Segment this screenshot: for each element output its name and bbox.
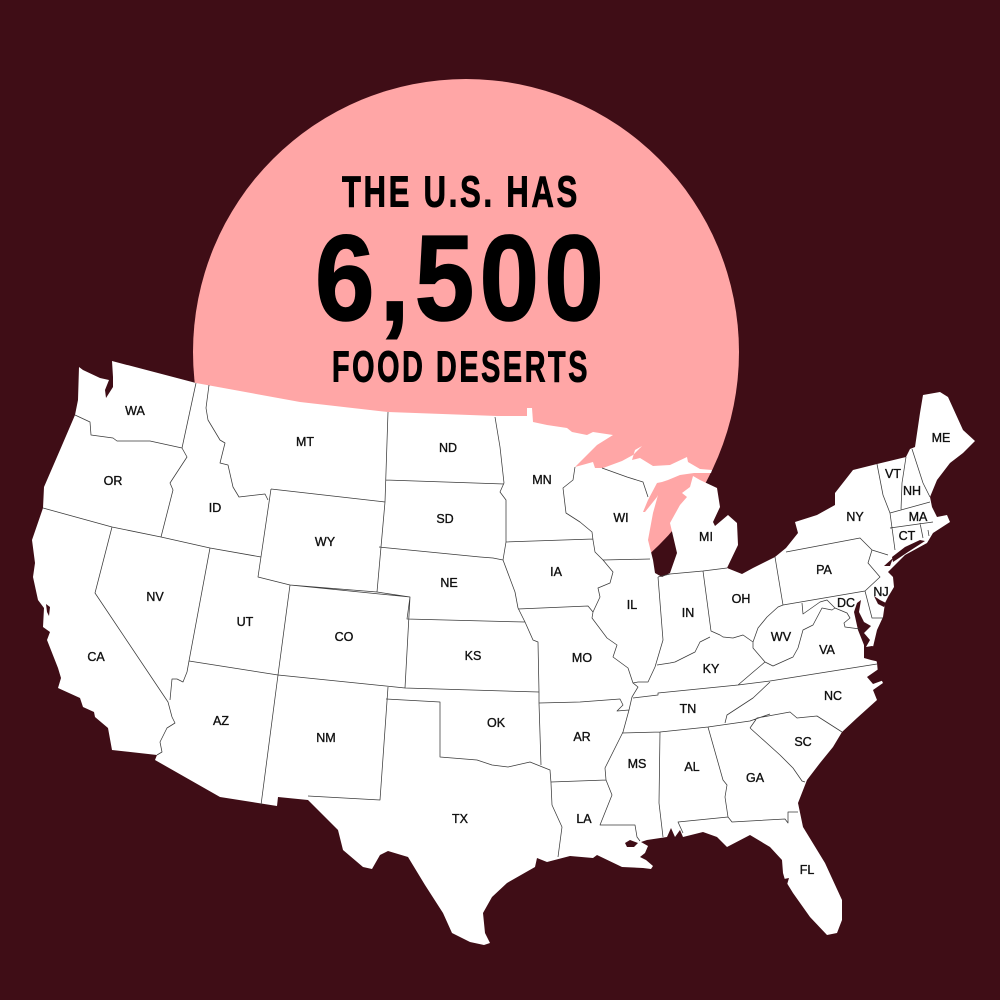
state abbreviations: WV <box>771 630 792 644</box>
state abbreviations: MO <box>572 651 592 665</box>
state abbreviations: CO <box>335 630 354 644</box>
state abbreviations <box>87 404 950 877</box>
state abbreviations: PA <box>816 563 833 577</box>
state abbreviations: NH <box>903 484 921 498</box>
state abbreviations: NE <box>440 576 458 590</box>
state abbreviations: GA <box>746 771 765 785</box>
state abbreviations: ND <box>439 441 457 455</box>
state abbreviations: IL <box>627 598 637 612</box>
state abbreviations: LA <box>576 812 592 826</box>
state abbreviations: SD <box>436 512 454 526</box>
state abbreviations: WA <box>125 404 145 418</box>
state abbreviations: MN <box>532 473 552 487</box>
state abbreviations: IN <box>682 606 694 620</box>
state abbreviations: VT <box>885 467 901 481</box>
state abbreviations: NV <box>146 590 164 604</box>
land outline <box>32 361 975 945</box>
state abbreviations: MA <box>909 510 928 524</box>
state abbreviations: OH <box>732 592 750 606</box>
state abbreviations: TN <box>680 702 696 716</box>
state abbreviations: ME <box>932 431 950 445</box>
state abbreviations: CA <box>87 650 105 664</box>
headline <box>315 168 609 392</box>
state abbreviations: MS <box>628 757 646 771</box>
state borders <box>43 383 933 857</box>
state abbreviations: WI <box>613 511 629 525</box>
state abbreviations: NM <box>316 731 336 745</box>
state abbreviations: DC <box>837 596 855 610</box>
state abbreviations: UT <box>237 615 254 629</box>
state abbreviations: WY <box>315 535 336 549</box>
state abbreviations: KS <box>465 649 481 663</box>
state abbreviations: AZ <box>213 714 229 728</box>
state abbreviations: VA <box>819 643 836 657</box>
state abbreviations: TX <box>452 812 469 826</box>
state abbreviations: ID <box>209 501 221 515</box>
US map <box>32 361 975 945</box>
big number: 6,500 <box>315 210 609 346</box>
state abbreviations: MI <box>699 530 713 544</box>
state abbreviations: AR <box>573 730 591 744</box>
state abbreviations: IA <box>550 565 563 579</box>
state abbreviations: NJ <box>873 585 889 599</box>
dark bays and sounds <box>46 540 925 888</box>
state abbreviations: KY <box>703 662 720 676</box>
headline line 1: THE U.S. HAS <box>342 168 580 216</box>
state abbreviations: OR <box>104 474 122 488</box>
state abbreviations: AL <box>684 760 700 774</box>
state abbreviations: CT <box>899 529 916 543</box>
state abbreviations: FL <box>800 863 814 877</box>
state abbreviations: OK <box>487 716 506 730</box>
headline line 3: FOOD DESERTS <box>332 342 590 392</box>
state abbreviations: NY <box>846 510 864 524</box>
state abbreviations: SC <box>794 735 812 749</box>
state abbreviations: NC <box>824 689 842 703</box>
state abbreviations: MT <box>296 435 314 449</box>
pink circle <box>193 79 739 625</box>
